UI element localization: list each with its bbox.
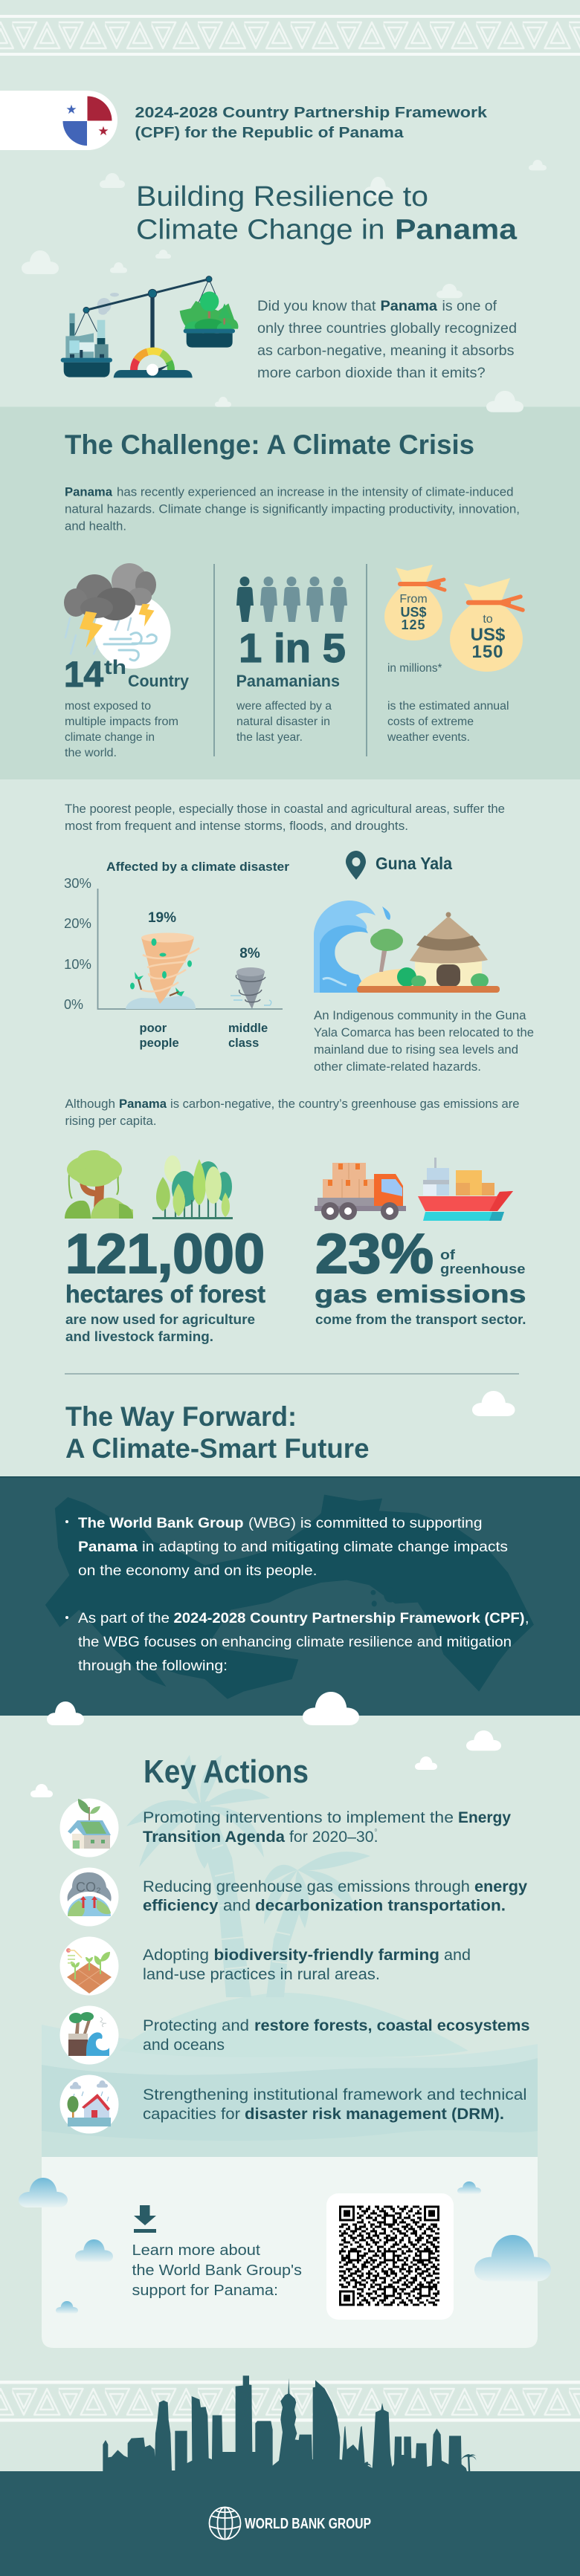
poorest people text: The poorest people, especially those in coastal and agricultural areas, suffer the xyxy=(65,802,505,816)
intro text: Panama xyxy=(381,298,437,314)
bullet text: (WBG) is committed to supporting xyxy=(248,1515,482,1531)
stat: 14th country: most exposed to xyxy=(65,700,151,713)
bullet text: through the following: xyxy=(78,1658,228,1674)
factory xyxy=(65,314,109,358)
bottom decorative band xyxy=(0,2381,580,2422)
heading: the way forward: The Way Forward: xyxy=(65,1401,297,1432)
panel: way forward dark xyxy=(0,1476,580,1716)
QR code xyxy=(326,2193,454,2320)
action: biodiversity farming: land-use practices in rural areas. xyxy=(143,1966,380,1983)
stat: forest hectares: 121,000 xyxy=(65,1222,265,1285)
flag pill xyxy=(0,91,117,150)
emissions intro text: is carbon-negative, the country’s greenhouse gas emissions are xyxy=(170,1097,519,1111)
stat: forest hectares: hectares of forest xyxy=(65,1280,265,1308)
stat: forest hectares xyxy=(65,1150,265,1344)
stat: 14th country xyxy=(64,563,189,759)
icon: money bag 125: 125 xyxy=(401,617,426,632)
white clouds xyxy=(30,1692,501,1797)
icon: balance scale with factory and trees xyxy=(61,276,238,377)
guna yala block: other climate-related hazards. xyxy=(314,1060,481,1074)
action: biodiversity farming: biodiversity-friendly farming xyxy=(214,1947,439,1964)
World Bank Group logo xyxy=(210,2507,371,2540)
stat: 1 in 5 xyxy=(236,577,347,744)
stat: 1 in 5: Panamanians xyxy=(236,672,340,690)
icon: CO2 cloud over globe xyxy=(59,1868,119,1926)
action: energy transition: Energy xyxy=(458,1809,511,1826)
emissions intro text xyxy=(65,1097,519,1128)
palm trunks xyxy=(192,1801,306,1997)
icon: money bag 125: US$ xyxy=(400,605,427,620)
header framework label xyxy=(135,104,488,141)
stat: 1 in 5: natural disaster in xyxy=(236,716,330,728)
stat: transport emissions: 23% xyxy=(315,1222,434,1285)
icon: Panama flag xyxy=(62,97,112,146)
bullet text: , xyxy=(525,1610,529,1626)
header framework label: 2024-2028 Country Partnership Framework xyxy=(135,104,488,121)
bullet text: The World Bank Group xyxy=(78,1515,244,1531)
palm fronds xyxy=(126,1755,370,1928)
intro text: only three countries globally recognized xyxy=(257,320,517,337)
intro text: is one of xyxy=(442,298,497,314)
chart: affected by a climate disaster xyxy=(64,860,290,1050)
smoke xyxy=(97,293,119,315)
icon: money bag 125: From xyxy=(399,593,428,606)
guna yala block: Guna Yala xyxy=(376,854,453,873)
action: protecting forests xyxy=(59,2006,529,2064)
water xyxy=(42,2025,538,2157)
action: energy transition: 0 xyxy=(375,1829,377,1833)
stat: transport emissions: greenhouse xyxy=(440,1262,525,1276)
action: protecting forests: Protecting and xyxy=(143,2017,249,2034)
icon: flooded house xyxy=(59,2074,119,2134)
bullet text: 2024-2028 Country Partnership Framework (CPF) xyxy=(174,1610,525,1626)
guna yala block: Yala Comarca has been relocated to the xyxy=(314,1025,534,1039)
y axis labels: 10% xyxy=(64,956,91,972)
icon: five people xyxy=(236,577,347,622)
guna yala block xyxy=(314,851,534,1074)
icon: money bag 150 xyxy=(450,578,523,672)
action: greenhouse gas: decarbonization transportation. xyxy=(255,1898,506,1914)
action: disaster risk management: Strengthening institutional framework and technical xyxy=(143,2086,526,2103)
stat: 1 in 5: 1 in 5 xyxy=(239,625,346,671)
icon: download arrow xyxy=(134,2205,156,2233)
blue clouds xyxy=(19,2178,551,2314)
action: disaster risk management xyxy=(59,2074,526,2134)
stat: transport emissions: gas emissions xyxy=(315,1280,526,1308)
icon: coastal erosion xyxy=(59,2006,119,2064)
icon: wave and hut xyxy=(314,901,500,993)
icon: cargo ship xyxy=(418,1158,513,1221)
icon: money bag 150: 150 xyxy=(471,642,504,662)
footer xyxy=(0,2471,580,2576)
icon: map pin xyxy=(346,851,366,880)
poorest people text: most from frequent and intense storms, floods, and droughts. xyxy=(65,819,408,833)
stat: transport emissions: come from the transport sector. xyxy=(315,1311,526,1327)
action: protecting forests: restore forests, coastal ecosystems xyxy=(254,2017,529,2034)
stat: 14th country: Country xyxy=(128,672,189,690)
stat: forest hectares: are now used for agriculture xyxy=(65,1311,255,1327)
panel: the challenge xyxy=(0,407,580,779)
stat: annual costs: is the estimated annual xyxy=(387,700,509,713)
action: biodiversity farming: and xyxy=(444,1947,471,1964)
action: disaster risk management: disaster risk management (DRM). xyxy=(245,2106,504,2123)
icon: money bag 150: to xyxy=(483,613,493,626)
action: biodiversity farming xyxy=(59,1936,471,1996)
top decorative band xyxy=(0,15,580,56)
icon: farm plot with sprouts xyxy=(59,1936,119,1996)
chart: affected by a climate disaster: middle xyxy=(228,1022,268,1035)
stat: annual costs: in millions* xyxy=(387,662,442,675)
gauge xyxy=(134,351,171,370)
bullet text: As part of the xyxy=(78,1610,170,1626)
intro text: more carbon dioxide than it emits? xyxy=(257,365,486,381)
intro text: Did you know that xyxy=(257,298,376,314)
bullet text: on the economy and on its people. xyxy=(78,1563,317,1579)
chart: affected by a climate disaster: class xyxy=(228,1036,259,1050)
action: energy transition: Promoting interventions to implement the xyxy=(143,1809,454,1826)
icon: forest xyxy=(152,1155,233,1219)
poorest people text xyxy=(65,802,505,833)
emissions intro text: rising per capita. xyxy=(65,1114,156,1128)
title: Building Resilience to xyxy=(136,181,428,212)
title: Panama xyxy=(395,214,518,245)
map of Panama silhouette xyxy=(45,1495,534,1699)
panel: learn more card xyxy=(19,2157,551,2348)
bullet text: in adapting to and mitigating climate change impacts xyxy=(142,1539,508,1555)
icon: large tornado xyxy=(126,933,199,1009)
stat: transport emissions: of xyxy=(440,1248,456,1262)
learn more text: Learn more about xyxy=(132,2242,260,2259)
challenge intro text: and health. xyxy=(65,519,126,533)
title xyxy=(136,181,518,245)
challenge intro text: natural hazards. Climate change is significantly impacting productivity, innovation, xyxy=(65,502,520,516)
learn more text: support for Panama: xyxy=(132,2282,278,2299)
key actions background: palms, island and water xyxy=(42,1755,538,2157)
icon: money bag 125 xyxy=(384,565,445,640)
action: energy transition xyxy=(59,1798,511,1858)
plants xyxy=(180,291,238,336)
chart: affected by a climate disaster: people xyxy=(140,1036,179,1050)
heading: the way forward: A Climate-Smart Future xyxy=(65,1433,369,1464)
action: greenhouse gas: Reducing greenhouse gas emissions through xyxy=(143,1878,470,1895)
stat: transport emissions xyxy=(315,1158,526,1327)
cloud: way forward xyxy=(472,1391,515,1416)
action: energy transition: Transition Agenda xyxy=(143,1829,285,1846)
action: greenhouse gas: energy xyxy=(474,1878,527,1895)
icon: small tornado xyxy=(231,967,271,1009)
chart axes xyxy=(98,889,283,1009)
stat: 14th country: th xyxy=(104,656,126,678)
island xyxy=(119,1993,468,2057)
title: Climate Change in xyxy=(136,214,385,245)
clouds across section edge xyxy=(215,391,523,412)
icon: Panama flag: ★ xyxy=(65,103,77,117)
heading: the challenge: The Challenge: A Climate Crisis xyxy=(65,429,474,460)
heading: the way forward xyxy=(65,1401,369,1464)
icon: solar house xyxy=(59,1798,119,1858)
y axis labels: 0% xyxy=(64,996,83,1012)
emissions intro text: Although xyxy=(65,1097,115,1111)
guna yala block: mainland due to rising sea levels and xyxy=(314,1042,518,1057)
emissions intro text: Panama xyxy=(119,1097,167,1111)
stat: 1 in 5: the last year. xyxy=(236,731,303,744)
chart: affected by a climate disaster: 8% xyxy=(239,946,260,961)
panama city skyline xyxy=(103,2375,477,2472)
action: greenhouse gas: and xyxy=(223,1898,251,1914)
World Bank Group logo: WORLD BANK GROUP xyxy=(245,2516,371,2532)
guna yala block: An Indigenous community in the Guna xyxy=(314,1008,526,1022)
icon: Panama flag: ★ xyxy=(97,124,109,139)
learn more text: the World Bank Group's xyxy=(132,2262,302,2279)
chart: affected by a climate disaster: 19% xyxy=(148,910,176,926)
chart: affected by a climate disaster: Affected by a climate disaster xyxy=(106,860,290,874)
stat: 14th country: 14 xyxy=(64,655,103,695)
icon: truck xyxy=(315,1163,406,1220)
chart: affected by a climate disaster: poor xyxy=(140,1022,167,1035)
stat: annual costs: costs of extreme xyxy=(387,716,474,728)
QR finder patterns xyxy=(339,2205,439,2306)
stat: forest hectares: and livestock farming. xyxy=(65,1328,213,1344)
header framework label: (CPF) for the Republic of Panama xyxy=(135,124,404,141)
bullet text: the WBG focuses on enhancing climate resilience and mitigation xyxy=(78,1634,512,1650)
action: greenhouse gas xyxy=(59,1868,527,1926)
action: protecting forests: and oceans xyxy=(143,2037,225,2054)
challenge intro text xyxy=(65,484,520,533)
challenge intro text: Panama xyxy=(65,484,113,499)
icon: jungle tree xyxy=(65,1150,133,1219)
background clouds: header xyxy=(22,160,547,298)
y axis labels xyxy=(64,875,91,1012)
stat: 14th country: climate change in xyxy=(65,731,155,744)
bullet text xyxy=(65,1515,529,1674)
bullet text: Panama xyxy=(78,1539,138,1555)
pivots xyxy=(83,276,212,313)
action: biodiversity farming: Adopting xyxy=(143,1947,209,1964)
intro text xyxy=(257,298,517,381)
y axis labels: 20% xyxy=(64,915,91,931)
intro text: as carbon-negative, meaning it absorbs xyxy=(257,343,515,359)
icon: CO2 cloud over globe: CO₂ xyxy=(76,1880,101,1895)
stat: 14th country: the world. xyxy=(65,747,117,759)
stat: annual costs xyxy=(384,565,523,744)
stat: 14th country: multiple impacts from xyxy=(65,716,178,728)
challenge intro text: has recently experienced an increase in the intensity of climate-induced xyxy=(117,484,513,499)
action: disaster risk management: capacities for xyxy=(143,2106,240,2123)
stat: 1 in 5: were affected by a xyxy=(236,700,332,713)
icon: money bag 150: US$ xyxy=(471,625,506,645)
stat: annual costs: weather events. xyxy=(387,731,470,744)
action: energy transition: for 2020–30. xyxy=(289,1829,378,1846)
y axis labels: 30% xyxy=(64,875,91,891)
icon: storm cloud xyxy=(64,563,171,669)
learn more text xyxy=(132,2242,302,2299)
action: greenhouse gas: efficiency xyxy=(143,1898,219,1914)
heading: key actions: Key Actions xyxy=(144,1753,309,1790)
